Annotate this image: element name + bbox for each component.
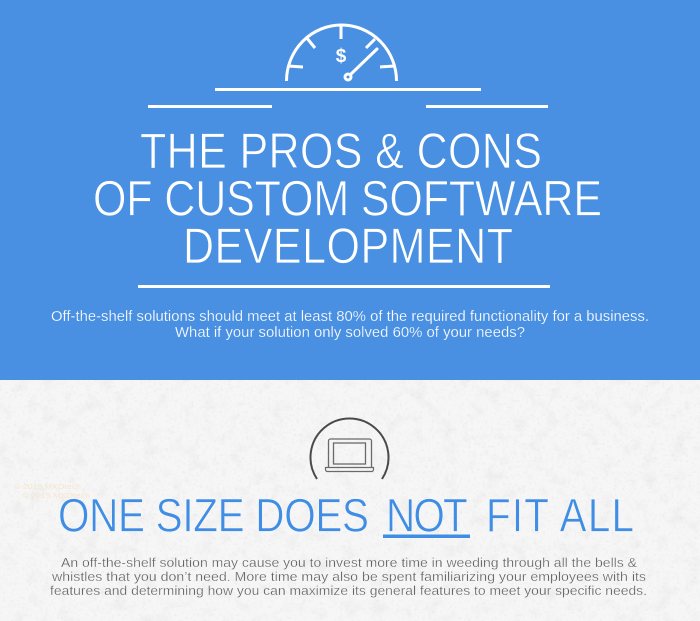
title: THE PROS & CONS	[140, 123, 542, 179]
heading: ONE SIZE DOES	[58, 490, 369, 542]
panel: header	[0, 0, 700, 380]
watermark: © 2019 MXOtech	[14, 482, 81, 491]
subtitle: What if your solution only solved 60% of your needs?	[175, 325, 525, 341]
watermark	[14, 482, 90, 500]
heading: FIT ALL	[486, 490, 634, 542]
title	[93, 123, 602, 274]
body text	[50, 555, 647, 598]
icon: speedometer with dollar sign	[286, 24, 396, 81]
heading: NOT	[386, 490, 468, 542]
subtitle: Off-the-shelf solutions should meet at least 80% of the required functionality for a business.	[51, 309, 649, 325]
watermark: © 2019 MXOtech	[22, 491, 90, 500]
panel: one size does not fit all	[0, 380, 700, 621]
title: OF CUSTOM SOFTWARE	[93, 170, 602, 226]
bottom rule	[138, 285, 550, 288]
body text: whistles that you don’t need. More time may also be spent familiarizing your employees with its	[51, 569, 647, 584]
icon: speedometer with dollar sign: $	[336, 46, 347, 67]
subtitle	[51, 309, 649, 341]
top rule	[215, 88, 481, 91]
heading	[58, 490, 634, 542]
body text: features and determining how you can maximize its general features to meet your specific needs.	[50, 583, 647, 598]
underline: not	[383, 534, 470, 538]
right rule	[426, 105, 548, 108]
left rule	[148, 105, 272, 108]
body text: An off-the-shelf solution may cause you to invest more time in weeding through all the bells &	[61, 555, 637, 570]
title: DEVELOPMENT	[183, 218, 513, 274]
icon: laptop in circle	[310, 418, 388, 479]
